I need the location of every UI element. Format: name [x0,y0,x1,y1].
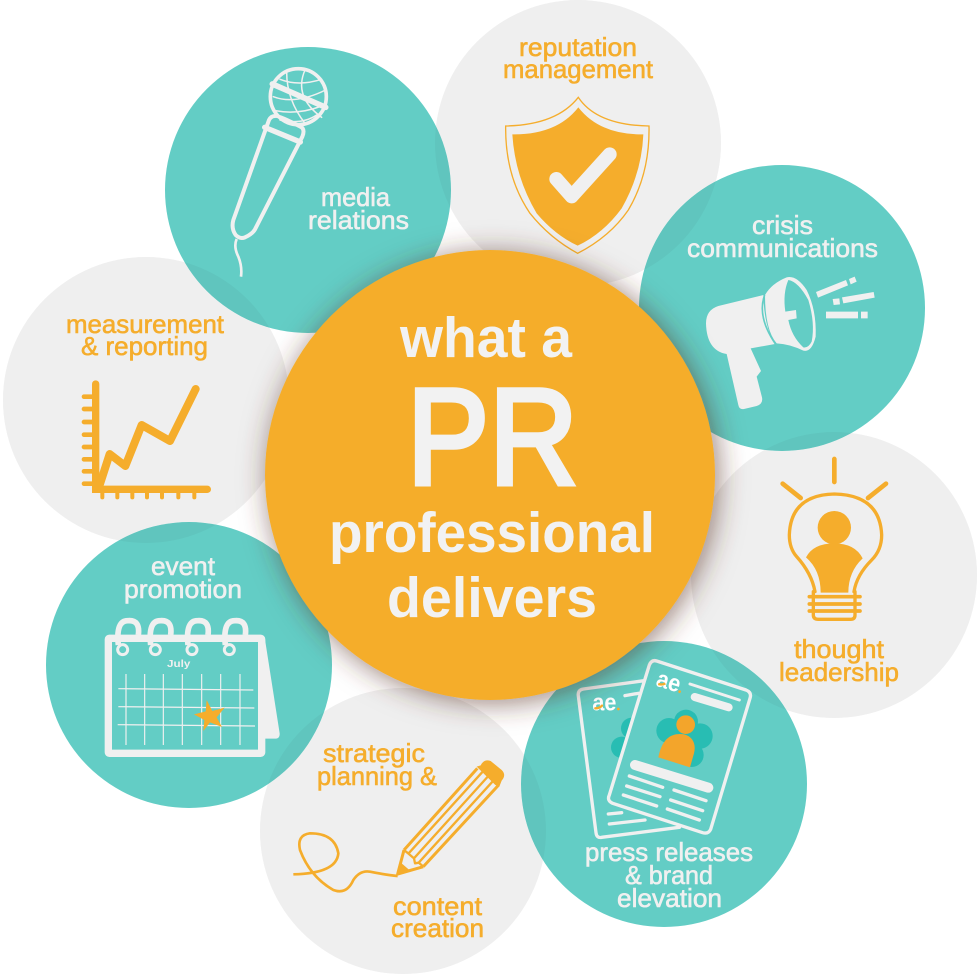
icon: calendar: July [167,659,191,670]
label: thought leadership: leadership [779,657,899,687]
label: press releases and brand elevation: press releases [585,837,753,867]
label: crisis communications [687,210,878,263]
label: content creation [391,891,484,943]
label: measurement and reporting: measurement [66,309,225,339]
panel: strategic planning and content creation [260,688,546,974]
panel: measurement and reporting [3,257,289,543]
panel: thought leadership [691,432,977,718]
label: reputation management [503,32,654,84]
icon: microphone [233,69,326,277]
panel: reputation management [435,0,721,286]
label: event promotion [124,551,242,604]
panel: press releases and brand elevation [521,641,807,927]
title: what a PR professional delivers: what a [399,306,573,370]
title: what a PR professional delivers [329,306,655,630]
title: what a PR professional delivers: PR [407,361,578,514]
front sheet [609,661,750,833]
icon: press release sheets: ae [653,665,684,698]
label: content creation: content [393,891,483,921]
label: reputation management: reputation [519,32,637,62]
label: event promotion: event [151,551,216,581]
back sheet: ae [592,690,616,717]
label: media relations: media [321,182,391,212]
label: reputation management: management [503,54,654,84]
label: press releases and brand elevation: & brand [625,860,713,890]
icon: line chart [84,384,207,497]
label: press releases and brand elevation [585,837,753,913]
back sheet [578,681,679,837]
label: media relations [308,182,409,235]
label: crisis communications: crisis [752,210,813,240]
icon: light bulb with person [783,459,886,619]
icon: pencil with scribble [293,760,504,891]
icon: megaphone [706,277,875,409]
icon: calendar [108,621,280,753]
panel: media relations [165,47,451,333]
label: thought leadership [779,634,899,687]
panel: crisis communications [639,165,925,451]
label: strategic planning: strategic [323,738,425,768]
icon: shield with check [506,97,649,253]
panel: event promotion [46,522,332,808]
title: what a PR professional delivers: delivers [387,566,597,630]
label: thought leadership: thought [794,634,885,664]
panel: central circle [265,250,715,700]
label: crisis communications: communications [687,233,878,263]
label: press releases and brand elevation: elevation [617,883,722,913]
label: measurement and reporting [66,309,225,361]
label: strategic planning: planning & [317,761,437,791]
label: strategic planning [317,738,437,791]
icon: press release sheets [578,661,750,837]
label: media relations: relations [308,205,409,235]
label: event promotion: promotion [124,574,242,604]
label: measurement and reporting: & reporting [81,331,208,361]
title: what a PR professional delivers: professional [329,501,655,565]
label: content creation: creation [391,913,484,943]
